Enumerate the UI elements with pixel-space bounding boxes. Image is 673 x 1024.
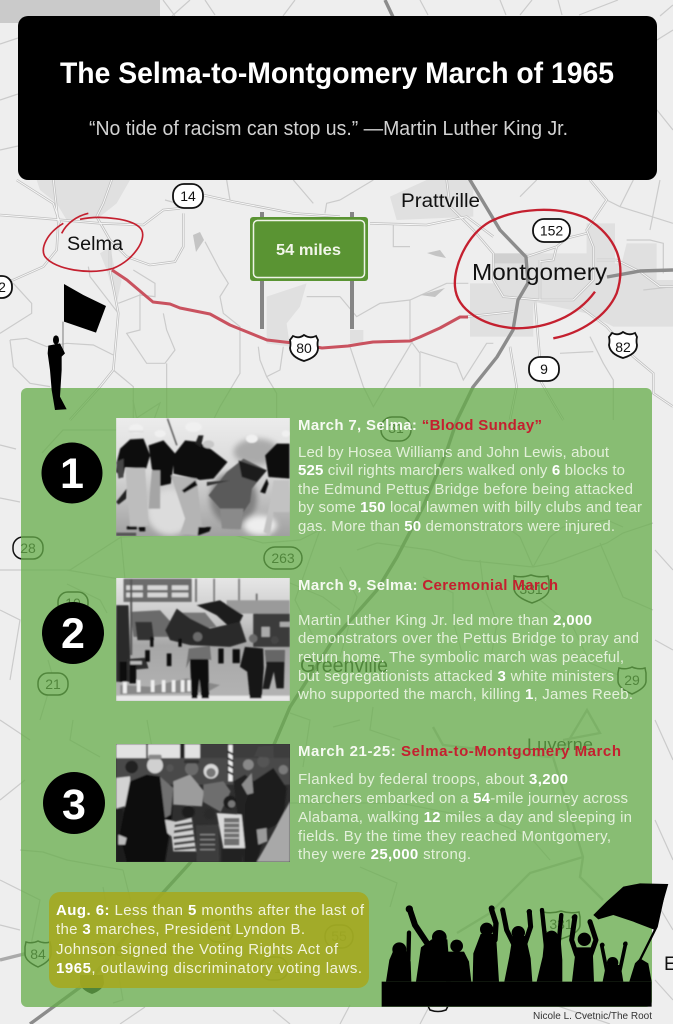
section 3 text xyxy=(298,743,632,863)
number 2: 2 xyxy=(61,610,85,658)
number 2 xyxy=(42,602,104,664)
section 2 text: but segregationists attacked 3 white ministers xyxy=(298,668,614,685)
highway sign: 54 miles: 54 miles xyxy=(276,242,341,259)
route shields under panel: 65 xyxy=(84,975,100,991)
map place labels: Evergreen xyxy=(95,940,173,960)
route shields under panel: 331 xyxy=(519,581,543,597)
icon: protester with flag xyxy=(48,284,106,410)
number 1: 1 xyxy=(60,450,84,498)
section 2 text: demonstrators over the Pettus Bridge to pray and xyxy=(298,630,639,647)
section 2 text: Martin Luther King Jr. led more than 2,000 xyxy=(298,612,592,629)
section 3 text: March 21-25: Selma-to-Montgomery March xyxy=(298,743,621,760)
number 3 xyxy=(43,772,105,834)
heading: The Selma-to-Montgomery March of 1965 xyxy=(60,57,614,90)
route shields under panel: 29 xyxy=(624,672,640,688)
section 1 text: the Edmund Pettus Bridge before being attacked xyxy=(298,481,633,498)
route shields under panel xyxy=(13,417,646,1012)
state route shields: 14 xyxy=(180,188,196,204)
route shields under panel: 71 xyxy=(266,960,282,976)
section 2 text: March 9, Selma: Ceremonial March xyxy=(298,577,558,594)
route shields under panel: 331 xyxy=(549,916,573,932)
shield: US 82: 82 xyxy=(615,339,631,355)
double-lined roads xyxy=(0,180,673,933)
highway sign: 54 miles xyxy=(250,212,368,329)
shield: US 82 xyxy=(609,332,637,358)
section 2 text: return home. The symbolic march was peaceful, xyxy=(298,649,624,666)
map place labels xyxy=(95,191,673,975)
section 1 text: March 7, Selma: “Blood Sunday” xyxy=(298,417,542,434)
map place labels: Luverne xyxy=(527,735,593,754)
route shields under panel: 84 xyxy=(30,946,46,962)
main green panel xyxy=(21,388,652,1007)
route shields under panel: 55 xyxy=(331,928,347,944)
roads under the panel xyxy=(0,400,320,720)
route shields under panel: 10 xyxy=(65,595,81,611)
number 3: 3 xyxy=(62,781,86,829)
state route shields: 152 xyxy=(540,222,563,238)
Montgomery label and circle xyxy=(455,210,620,338)
callout: Aug. 6 Voting Rights Act xyxy=(49,892,369,988)
section 3 text: Flanked by federal troops, about 3,200 xyxy=(298,771,568,788)
section 3 text: marchers embarked on a 54-mile journey across xyxy=(298,790,628,807)
route shields under panel: 263 xyxy=(271,550,295,566)
shield: US 80 xyxy=(290,335,318,361)
map place labels: Greenville xyxy=(300,655,388,677)
section 3 text: fields. By the time they reached Montgomery, xyxy=(298,828,611,845)
shield: US 80: 80 xyxy=(296,340,312,356)
callout: Aug. 6 Voting Rights Act: the 3 marches, President Lyndon B. xyxy=(56,921,305,938)
map place labels: Prattville xyxy=(401,191,480,212)
state route shields: 9 xyxy=(540,361,548,377)
section 2 text xyxy=(297,577,639,703)
small dark map flecks xyxy=(193,232,446,297)
quote: “No tide of racism can stop us.” —Martin Luther King Jr. xyxy=(89,118,568,140)
callout: Aug. 6 Voting Rights Act: Johnson signed the Voting Rights Act of xyxy=(56,941,339,958)
title panel xyxy=(18,16,657,180)
credit: Nicole L. Cvetnic/The Root xyxy=(533,1011,652,1022)
section 1 text xyxy=(298,417,642,535)
section 3 text: Alabama, walking 12 miles a day and sleeping in xyxy=(298,809,632,826)
number 1 xyxy=(42,442,102,504)
photo 2: marchers on the Pettus Bridge xyxy=(116,578,290,701)
state route shields xyxy=(0,184,570,381)
section 3 text: they were 25,000 strong. xyxy=(298,846,471,863)
route shields under panel: 21 xyxy=(45,676,61,692)
photo 3: marchers with children xyxy=(116,744,290,862)
route shields under panel: 31 xyxy=(388,420,404,436)
urban patches xyxy=(0,0,673,347)
route line: 54 miles from Selma to Montgomery xyxy=(112,270,468,348)
callout: Aug. 6 Voting Rights Act: 1965, outlawing discriminatory voting laws. xyxy=(56,960,362,977)
Montgomery label and circle: Montgomery xyxy=(472,259,608,285)
route shields under panel: 28 xyxy=(20,540,36,556)
section 2 text: who supported the march, killing 1, James Reeb. xyxy=(297,686,633,703)
Selma label and circle: Selma xyxy=(67,234,123,255)
icon: crowd silhouette with flag xyxy=(382,883,668,1007)
section 1 text: Led by Hosea Williams and John Lewis, about xyxy=(298,444,610,461)
callout: Aug. 6 Voting Rights Act: Aug. 6: Less than 5 months after the last of xyxy=(56,902,365,919)
photo 1: lawmen at Blood Sunday xyxy=(116,418,290,536)
section 1 text: 525 civil rights marchers walked only 6 blocks to xyxy=(298,462,625,479)
Selma label and circle xyxy=(43,213,143,271)
section 1 text: gas. More than 50 demonstrators were injured. xyxy=(298,518,615,535)
section 1 text: by some 150 local lawmen with billy clubs and tear xyxy=(298,499,642,516)
route shields under panel: 31 xyxy=(212,923,228,939)
